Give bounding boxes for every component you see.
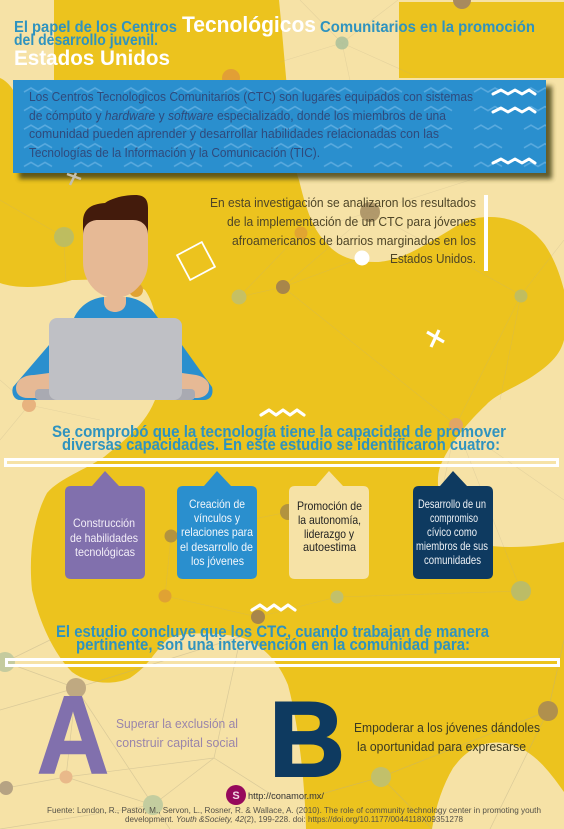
conclusion B: B bbox=[269, 679, 345, 799]
conclusion A: Superar la exclusión al bbox=[116, 717, 238, 731]
card: vínculos y relaciones: relaciones para bbox=[181, 525, 253, 539]
icon: white wave above second heading bbox=[252, 605, 295, 610]
divider bar two bbox=[6, 660, 558, 666]
vertical white bar beside description bbox=[484, 195, 488, 271]
card: autonomía y liderazgo: liderazgo y bbox=[304, 527, 354, 541]
card: compromiso cívico: comunidades bbox=[424, 553, 481, 567]
card: vínculos y relaciones: los jóvenes bbox=[191, 554, 244, 568]
logo and website: http://conamor.mx/ bbox=[248, 791, 325, 801]
heading: technology capacities bbox=[52, 422, 506, 454]
card: autonomía y liderazgo: Promoción de bbox=[297, 499, 362, 513]
conclusion B bbox=[269, 679, 540, 799]
heading: study conclusion: El estudio concluye que los CTC, cuando trabajan de manera bbox=[56, 622, 489, 641]
card: compromiso cívico: compromiso bbox=[430, 511, 478, 525]
conclusion B: Empoderar a los jóvenes dándoles bbox=[354, 721, 540, 735]
text block: research description: de la implementación de un CTC para jóvenes bbox=[227, 215, 476, 229]
panel: intro definition of CTC: de cómputo y hardware y software especializado, donde los miembros de una bbox=[29, 109, 446, 123]
panel: intro definition of CTC: Los Centros Tecnologicos Comunitarios (CTC) son lugares equipados con sistemas bbox=[29, 90, 473, 104]
card: habilidades tecnológicas: Construcción bbox=[73, 516, 135, 530]
heading: study conclusion: pertinente, son una intervención en la comunidad para: bbox=[76, 635, 470, 654]
source citation bbox=[47, 805, 541, 824]
heading: study conclusion bbox=[56, 622, 489, 654]
title: Comunitarios en la promoción bbox=[320, 19, 535, 36]
icon: rotated square outline bbox=[177, 242, 215, 280]
card: vínculos y relaciones bbox=[177, 471, 257, 579]
card: autonomía y liderazgo: la autonomía, bbox=[298, 513, 361, 527]
card: habilidades tecnológicas: de habilidades bbox=[70, 531, 138, 545]
heading: technology capacities: Se comprobó que la tecnología tiene la capacidad de promover bbox=[52, 422, 506, 441]
illustration: person with laptop bbox=[12, 195, 213, 400]
icon: small cross under the intro panel bbox=[67, 173, 81, 185]
icon: white dot bbox=[354, 250, 370, 266]
heading: technology capacities: diversas capacidades. En este estudio se identificaron cuatro: bbox=[62, 435, 500, 454]
text block: research description bbox=[210, 196, 476, 266]
card: autonomía y liderazgo bbox=[289, 471, 369, 579]
text block: research description: afroamericanos de barrios marginados en los bbox=[232, 234, 476, 248]
conclusion A: construir capital social bbox=[116, 736, 238, 750]
icon: white wave above first heading bbox=[261, 410, 304, 415]
title bbox=[14, 12, 535, 70]
title: Estados Unidos bbox=[14, 47, 170, 70]
source citation: Fuente: London, R., Pastor, M., Servon, L., Rosner, R. & Wallace, A. (2010). The role of community technology center in promoting youth bbox=[47, 805, 541, 815]
conclusion B: la oportunidad para expresarse bbox=[357, 740, 526, 754]
title: del desarrollo juvenil. bbox=[14, 32, 158, 49]
source citation: development. Youth &Society, 42(2), 199-228. doi: https://doi.org/10.1177/0044118X09351278 bbox=[125, 814, 463, 824]
text block: research description: Estados Unidos. bbox=[390, 252, 476, 266]
text block: research description: En esta investigación se analizaron los resultados bbox=[210, 196, 476, 210]
card: vínculos y relaciones: vínculos y bbox=[194, 511, 240, 525]
divider bar one bbox=[6, 460, 558, 466]
card: habilidades tecnológicas: tecnológicas bbox=[75, 545, 135, 559]
card: compromiso cívico: Desarrollo de un bbox=[418, 497, 486, 511]
card: compromiso cívico bbox=[413, 471, 493, 579]
card: compromiso cívico: miembros de sus bbox=[416, 539, 488, 553]
conclusion A: A bbox=[37, 674, 109, 797]
conclusion A bbox=[37, 674, 238, 797]
card: autonomía y liderazgo: autoestima bbox=[303, 540, 356, 554]
card: vínculos y relaciones: Creación de bbox=[189, 497, 245, 511]
card: habilidades tecnológicas bbox=[65, 471, 145, 579]
logo and website: S bbox=[232, 790, 240, 802]
title: Tecnológicos bbox=[182, 12, 316, 37]
panel: intro definition of CTC: Tecnologías de la Información y la Comunicación (TIC). bbox=[29, 146, 320, 160]
icon: white cross bbox=[427, 330, 444, 347]
card: vínculos y relaciones: el desarrollo de bbox=[180, 540, 253, 554]
panel: intro definition of CTC: comunidad pueden aprender y desarrollar habilidades relacionadas con las bbox=[29, 127, 439, 141]
title: El papel de los Centros bbox=[14, 19, 177, 36]
panel: intro definition of CTC bbox=[13, 80, 552, 179]
card: compromiso cívico: cívico como bbox=[427, 525, 477, 539]
logo and website bbox=[226, 785, 325, 805]
